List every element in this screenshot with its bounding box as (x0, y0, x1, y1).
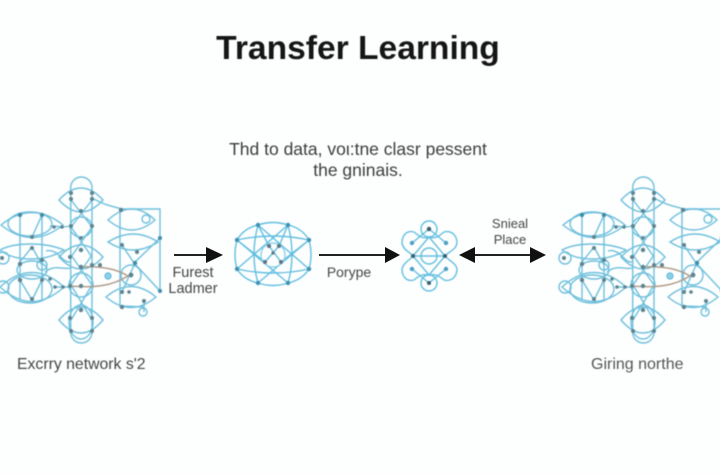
right network diagram (559, 177, 720, 343)
arrow label: Snieal Place (492, 216, 528, 247)
arrow label: Furest Ladmer: Furest (172, 265, 214, 281)
right network label: Giring northe (591, 356, 684, 373)
double-headed arrow: small network and right network (459, 247, 546, 263)
left network diagram (0, 177, 162, 343)
arrow label: Snieal Place: Snieal (492, 216, 528, 231)
arrow label: Snieal Place: Place (494, 232, 526, 247)
arrow label: Porype: Porype (327, 264, 371, 280)
arrow label: Furest Ladmer (168, 265, 218, 297)
arrow: middle network to small network (319, 247, 400, 263)
left network label: Excrry network s'2 (17, 356, 146, 373)
middle network diagram (235, 222, 311, 286)
subtitle text block (229, 139, 487, 180)
subtitle text block: the gninais. (313, 160, 403, 180)
small network diagram (402, 221, 457, 291)
arrow label: Furest Ladmer: Ladmer (168, 281, 218, 297)
subtitle text block: Thd to data, voι:tne clasr pessent (229, 139, 487, 159)
arrow: left network to middle network (174, 247, 223, 263)
title: Transfer Learning (216, 30, 500, 67)
